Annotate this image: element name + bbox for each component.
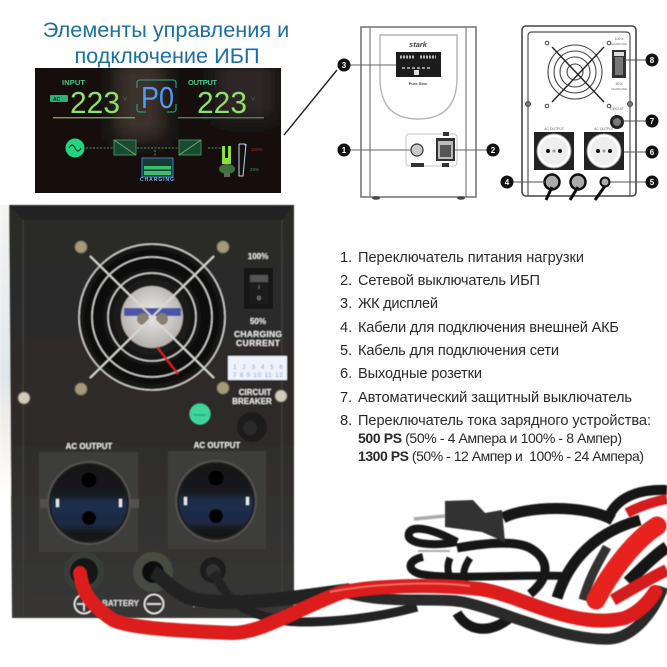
- callout 8: [646, 54, 658, 66]
- OUTPUT readout: [178, 78, 264, 120]
- numbered legend: 6.: [340, 366, 352, 382]
- numbered legend: 3.: [340, 296, 352, 312]
- UPS body: [9, 205, 294, 618]
- title: Элементы управления и: [43, 17, 289, 42]
- photo backdrop: [0, 205, 12, 495]
- callout 2: [486, 144, 500, 156]
- numbered legend: Кабель для подключения сети: [358, 343, 559, 359]
- rear cable glands: [544, 174, 610, 200]
- callout 4: [500, 176, 514, 188]
- INPUT readout: [50, 78, 135, 120]
- front display bezel: Pure Sine: [409, 81, 428, 86]
- front display bezel: stark: [409, 40, 428, 49]
- charging current labels: [234, 252, 282, 348]
- date sticker: 7 8 9 10 11 12: [233, 372, 283, 379]
- numbered legend: Переключатель тока зарядного устройства:: [358, 413, 651, 429]
- cable glands: [64, 552, 226, 592]
- numbered legend: 7.: [340, 390, 352, 406]
- rear AC sockets: AC OUTPUT: [544, 127, 564, 131]
- charging current labels: CURRENT: [236, 338, 281, 348]
- photo: UPS rear panel: [0, 205, 294, 618]
- power plug: [414, 500, 505, 551]
- INPUT readout: INPUT: [62, 78, 85, 87]
- callout 5: 5: [650, 178, 655, 187]
- charging current switch: o: [257, 295, 261, 302]
- callout 5: [646, 176, 658, 188]
- battery charging icon: CHARGING: [140, 177, 174, 183]
- numbered legend: [340, 250, 651, 464]
- rear AC sockets: AC OUTPUT: [594, 127, 614, 131]
- polarity marks and battery label: AC: [193, 600, 205, 609]
- battery charging icon: [140, 158, 174, 183]
- numbered legend: 8.: [340, 413, 352, 429]
- callout 4: 4: [505, 178, 510, 187]
- circuit breaker: [232, 388, 272, 442]
- circuit breaker: BREAKER: [232, 397, 272, 406]
- numbered legend: 4.: [340, 320, 352, 336]
- load bulb and level: 25%: [250, 167, 259, 172]
- OUTPUT readout: OUTPUT: [188, 78, 217, 87]
- front display bezel: [380, 35, 457, 119]
- rear fan grille: [526, 41, 632, 108]
- green passed sticker: PASSED: [194, 413, 207, 417]
- AC output right: [168, 441, 266, 549]
- charging current labels: 50%: [250, 317, 266, 326]
- front control panel: [406, 132, 457, 167]
- AC output right: AC OUTPUT: [194, 441, 240, 450]
- green passed sticker: [190, 404, 210, 424]
- panel: LCD display photo: [35, 60, 281, 193]
- callout 1: [338, 144, 350, 156]
- red battery cable: [80, 573, 655, 633]
- numbered legend: 1.: [340, 250, 352, 266]
- callout 7: 7: [650, 117, 655, 126]
- callout 6: 6: [650, 148, 655, 157]
- numbered legend: Кабели для подключения внешней АКБ: [358, 320, 619, 336]
- rear charging switch: CHARGING: [611, 87, 628, 91]
- INPUT readout: AC: [53, 97, 61, 103]
- rear callout lines: [513, 60, 646, 182]
- load bulb and level: 100%: [251, 147, 263, 152]
- diagram: rear view: [513, 26, 646, 200]
- cables and plug: [80, 490, 667, 639]
- numbered legend: Переключатель питания нагрузки: [358, 250, 584, 266]
- INPUT readout: 223: [70, 85, 120, 120]
- load bulb and level: [219, 144, 263, 177]
- callout 8: 8: [650, 56, 655, 65]
- rear charging switch: CHARGING: [611, 42, 628, 46]
- charging current labels: CHARGING: [234, 329, 282, 339]
- mode indicator P0: P0: [141, 80, 174, 115]
- numbered legend: ЖК дисплей: [358, 296, 438, 312]
- rear AC sockets: [534, 127, 624, 170]
- INPUT readout: V: [123, 97, 127, 103]
- AC output left: [39, 442, 139, 552]
- callout 2: 2: [491, 146, 496, 155]
- energy flow diagram: [66, 138, 224, 158]
- charging current switch: [244, 268, 273, 309]
- polarity marks and battery label: [74, 594, 205, 614]
- title: [43, 17, 289, 68]
- polarity marks and battery label: BATTERY: [102, 599, 140, 608]
- numbered legend: 5.: [340, 343, 352, 359]
- callout 6: [646, 146, 658, 158]
- date sticker: 1 2 3 4 5 6: [233, 364, 283, 371]
- numbered legend: Выходные розетки: [358, 366, 482, 382]
- date sticker: [228, 356, 287, 380]
- arrow: LCD to front display: [284, 70, 337, 135]
- rear circuit breaker: [610, 107, 624, 129]
- rear charging switch: 50%: [616, 82, 622, 86]
- black cable loops: [409, 490, 667, 629]
- AC power cable: [213, 573, 417, 622]
- red cable loops: [596, 526, 657, 600]
- numbered legend: 2.: [340, 273, 352, 289]
- OUTPUT readout: 223: [197, 85, 247, 120]
- diagram: front view: [350, 27, 488, 200]
- callout 7: [646, 114, 658, 128]
- fan: [78, 243, 226, 391]
- callout 1: 1: [342, 146, 347, 155]
- numbered legend: 500 PS (50% - 4 Ампера и 100% - 8 Ампер): [358, 430, 622, 446]
- callout 3: [338, 58, 350, 72]
- charging current labels: 100%: [248, 252, 268, 261]
- title: подключение ИБП: [74, 43, 260, 68]
- rear charging switch: 100%: [615, 37, 623, 41]
- numbered legend: 1300 PS (50% - 12 Ампер и 100% - 24 Ампера): [358, 448, 644, 464]
- numbered legend: Автоматический защитный выключатель: [358, 390, 632, 406]
- callout lines: [350, 65, 488, 150]
- callout 3: 3: [342, 61, 347, 70]
- rear circuit breaker: CIRCUIT: [610, 107, 624, 111]
- charging current switch: I: [258, 285, 260, 291]
- fan screws: [18, 241, 287, 404]
- AC output left: AC OUTPUT: [66, 442, 112, 451]
- OUTPUT readout: V: [251, 97, 255, 103]
- black battery cable: [153, 572, 350, 602]
- numbered legend: Сетевой выключатель ИБП: [358, 273, 540, 289]
- circuit breaker: CIRCUIT: [239, 388, 271, 397]
- rear charging switch: [611, 37, 628, 91]
